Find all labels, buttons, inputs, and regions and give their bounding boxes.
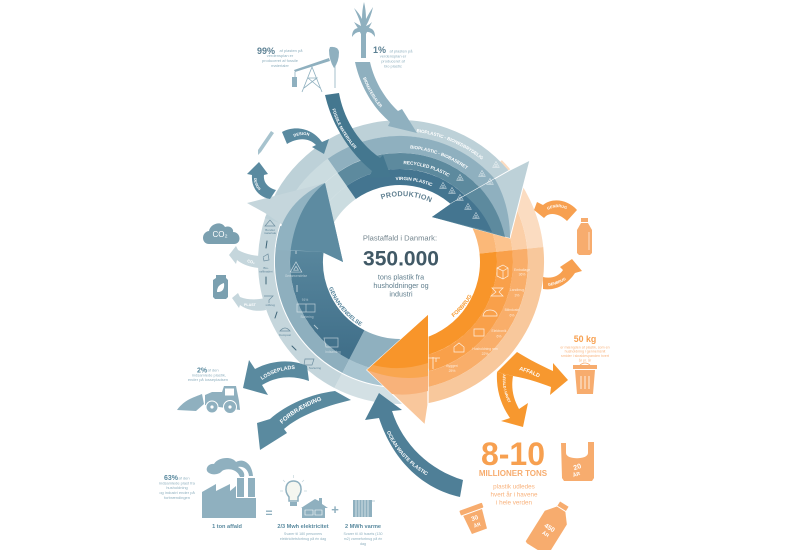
icon: big bottle: ÅR: [541, 529, 551, 539]
callout: 63% incineration: og industri ender på: [159, 490, 195, 495]
band labels: production: BIOPLASTIC - BIOBASERET: [410, 145, 468, 169]
icon: cup: 30: [470, 514, 480, 523]
icon: big bottle: [525, 497, 575, 550]
center text: plastaffald: husholdninger og: [373, 281, 429, 290]
callout: 63% incineration: forbrændingen: [164, 495, 190, 500]
callout: 50 kg: år pr. år: [579, 358, 592, 362]
text: heating: [344, 524, 382, 546]
icon: sugarcane: [352, 2, 375, 58]
icon: cup: ÅR: [473, 520, 482, 530]
headline: 8-10 million tons: hvert år i havene: [491, 490, 538, 498]
genanvendelse stage labels: 91%: [302, 298, 308, 302]
arrow: losseplads: LOSSEPLADS: [260, 365, 295, 380]
callout: 2% landfill: [188, 368, 228, 382]
text: electricity: elektricitetsforbrug på én dag: [280, 537, 326, 541]
callout: 63% incineration: husholdning: [166, 485, 188, 490]
arrow: genbrug bottom: [543, 259, 582, 290]
icon: plastic bag: [561, 442, 594, 481]
arrow: plast: PLAST: [244, 303, 257, 307]
forbrug segment labels: Bilindustri: [505, 308, 520, 312]
arrow: co2: CO₂: [247, 258, 256, 265]
forbrug segment labels: 6%: [497, 334, 501, 338]
center text: plastaffald: [363, 234, 439, 298]
genanvendelse stage labels: Bundet: [265, 228, 275, 232]
arrow: co2: [229, 246, 263, 268]
arrow: genbrug top: GENBRUG: [547, 204, 567, 210]
callout: 2% landfill: indsamlede plastik,: [192, 372, 226, 378]
heading: forbrug: FORBRUG: [451, 294, 472, 318]
heading: genanvendelse: GENANVENDELSE: [330, 287, 362, 326]
callout: 99% fossil: materialer: [271, 63, 290, 68]
recycling icons on production bands: [440, 161, 499, 218]
band labels: production: [396, 129, 483, 186]
forbrug segment labels: Byggeri: [446, 364, 458, 368]
icon: plastic bag: ÅR: [572, 470, 581, 479]
genanvendelse stage labels: Indsamling: [325, 350, 341, 354]
panel: forbrug ring, light top part: [463, 166, 535, 253]
text: heating: dag: [360, 542, 366, 546]
icon: co2 cloud: [203, 223, 240, 244]
callout: 2% landfill: 2%: [197, 368, 208, 374]
heading: produktion: PRODUKTION: [380, 191, 432, 202]
callout: 63% incineration: [159, 475, 196, 500]
arrow: ocean waste plastic: [365, 393, 463, 497]
text: heating: m2) varmeforbrug på én: [344, 537, 382, 541]
callout: 2% landfill: ender på lossepladsen: [188, 377, 228, 382]
icon: light bulb: [280, 475, 307, 506]
panel: forbrug ring: [419, 248, 536, 397]
callout: 63% incineration: af den: [178, 476, 190, 480]
headline: 8-10 million tons: i hele verden: [496, 500, 533, 506]
callout: 99% fossil: 99%: [257, 46, 275, 56]
arrow: forbraending: [257, 391, 351, 450]
arrow: genbrug top: [534, 200, 577, 221]
arrow: fossile materialer: [325, 93, 388, 174]
equation: one ton waste: [212, 506, 273, 530]
forbrug segment labels: Husholdning mm: [472, 347, 498, 351]
genanvendelse stage labels: raffinaderi: [259, 270, 273, 274]
headline: 8-10 million tons: 8-10: [481, 436, 545, 472]
genanvendelse stage labels: Sortering: [301, 315, 314, 319]
center text: plastaffald: industri: [389, 290, 413, 298]
band labels: production: VIRGIN PLASTIC: [396, 176, 432, 186]
genanvendelse stage labels: Genanvendelse: [285, 274, 307, 278]
arrow: biomaterialer: BIOMATERIALER: [363, 77, 382, 108]
callout: 99% fossil: [257, 46, 303, 68]
headline: 8-10 million tons: [479, 436, 548, 506]
arrow: design: [282, 128, 329, 154]
center text: plastaffald: tons plastik fra: [378, 272, 424, 282]
callout: 2% landfill: af den: [207, 368, 219, 372]
center text: plastaffald: Plastaffald i Danmark:: [363, 234, 437, 242]
forbrug segment labels: Landbrug: [510, 288, 524, 292]
callout: 1% bio: bio plastic: [384, 64, 402, 68]
genanvendelse stage labels: Sortering: [309, 366, 321, 370]
equation: one ton waste: =: [265, 506, 273, 520]
genanvendelse stage labels: materiale: [264, 231, 276, 235]
forbrug segment labels: Elektronik: [492, 329, 507, 333]
callout: 1% bio: af plasten på: [390, 48, 413, 54]
arrow: forbraending: FORBRÆNDING: [280, 396, 322, 424]
panel: genanvendelse ring: [266, 218, 357, 381]
callout: 63% incineration: 63%: [164, 475, 179, 482]
callout: 50 kg: smider i skraldespanden hvert: [561, 354, 609, 358]
callout: 1% bio: [373, 45, 413, 68]
icon: bottle: [577, 218, 592, 255]
callout: 63% incineration: indsamlede plast fra: [159, 480, 196, 486]
genanvendelse stage labels: Kompost: [279, 333, 291, 337]
icon: oil pump: [292, 47, 339, 92]
callout: 99% fossil: verdensplan er: [267, 53, 294, 58]
arrow: affald: AFFALD: [519, 366, 540, 377]
arrow: affald: [497, 352, 568, 395]
genanvendelse stage labels: Jordbrug: [263, 303, 275, 307]
text: heating: 2 MWh varme: [345, 524, 381, 530]
headline: 8-10 million tons: plastik udledes: [493, 484, 535, 490]
arrow: affald i havet: AFFALD I HAVET: [502, 374, 511, 402]
callout: 1% bio: produceret af: [381, 58, 406, 64]
headline: 8-10 million tons: MILLIONER TONS: [479, 469, 548, 478]
genanvendelse stage labels: Bio-: [263, 266, 269, 270]
forbrug segment labels: 6%: [510, 314, 514, 318]
arrow: design: DESIGN: [293, 132, 310, 137]
icon: bulldozer: [177, 386, 240, 414]
icon: big bottle: 450: [543, 522, 556, 534]
band labels: production: RECYCLED PLASTIC: [404, 160, 450, 176]
arrow: affald i havet: [496, 372, 528, 427]
arrow: fossile materialer: FOSSILE MATERIALER: [332, 108, 356, 149]
equation: one ton waste: 1 ton affald: [212, 524, 242, 530]
band labels: production: BIOPLASTIC - BIONEDBRYDELIG: [416, 129, 483, 160]
genanvendelse stage labels: [259, 220, 341, 370]
forbrug segment labels: 25%: [449, 369, 455, 373]
callout: 1% bio: verdensplan er: [380, 54, 407, 58]
icon: radiator: [353, 500, 375, 517]
callout: 50 kg: er mængden af plastik, som en: [560, 346, 610, 350]
text: electricity: [277, 524, 329, 541]
arrow: plast: [232, 293, 266, 311]
recycling arrow head: [247, 183, 343, 262]
panel: produktion ring: [273, 128, 503, 221]
callout: 99% fossil: af plasten på: [280, 48, 303, 53]
icon: factory with smoke: [202, 458, 256, 518]
forbrug arrow head: [367, 315, 428, 425]
text: electricity: 2/3 Mwh elektricitet: [277, 524, 329, 530]
arrow: biomaterialer: [355, 62, 417, 133]
callout: 99% fossil: produceret af fossile: [262, 58, 299, 63]
forbrug segment labels: 36%: [519, 272, 525, 276]
callout: 50 kg: husholdning i gennemsnit: [565, 350, 605, 354]
text: heating: Svarer til 40 husets (130: [344, 532, 382, 536]
forbrug segment labels: 22%: [482, 352, 488, 356]
genanvendelse stage labels: Granulat: [292, 237, 304, 241]
plus sign: +: [331, 502, 339, 517]
production band tails under recycling arrow: [298, 166, 351, 220]
forbrug segment labels: [428, 265, 530, 373]
icon: co2 cloud: CO₂: [212, 230, 228, 239]
icon: trash bin: [573, 363, 597, 394]
callout: 50 kg: [560, 334, 610, 362]
panel: recycling tail overlap: [338, 345, 435, 396]
arrow: ocean waste plastic: OCEAN WASTE PLASTIC: [387, 431, 428, 475]
icon: house: [301, 498, 328, 518]
arrow: design up: DESIGN: [254, 178, 261, 190]
arrow: design up: [247, 162, 276, 199]
icon: gas tank: [213, 275, 228, 299]
text: electricity: Svarer til 180 personers: [284, 532, 322, 536]
icon: pencil: [258, 131, 274, 155]
forbrug segment labels: 3%: [515, 294, 519, 298]
arrow: losseplads: [243, 360, 309, 395]
icon: cup: [459, 503, 491, 535]
arrow: genbrug bottom: GENBRUG: [548, 278, 566, 286]
icon: plastic bag: 20: [573, 463, 582, 472]
center text: plastaffald: 350.000: [363, 248, 439, 270]
produktion arrow head: [432, 160, 530, 238]
callout: 50 kg: 50 kg: [574, 334, 596, 344]
callout: 1% bio: 1%: [373, 45, 386, 55]
forbrug segment labels: Emballage: [514, 268, 530, 272]
